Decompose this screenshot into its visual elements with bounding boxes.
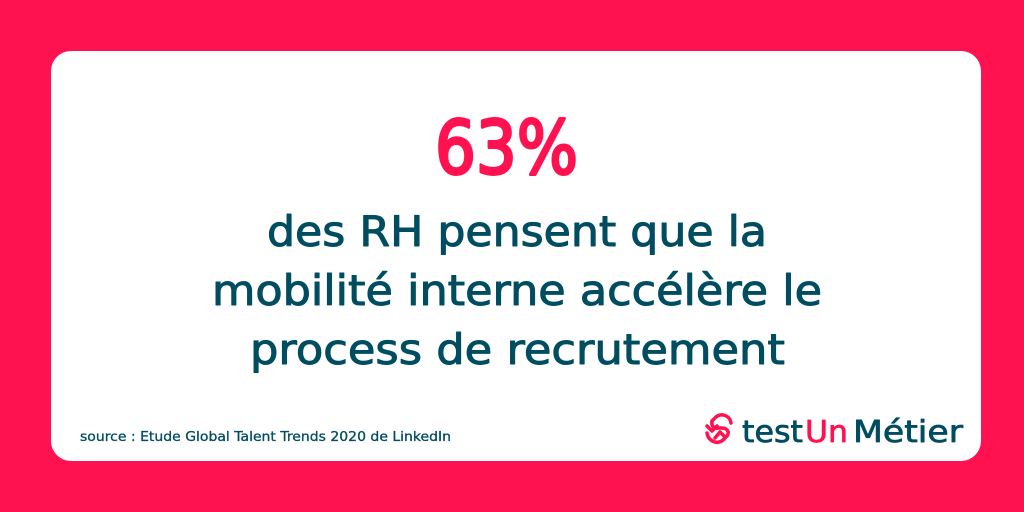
text block: main statement: process de recrutement [250,325,785,374]
logo: testUnMétier [707,415,964,450]
text block: main statement [212,207,822,374]
text block: source: source : Etude Global Talent Trends 2020 de LinkedIn [80,430,451,445]
text block: main statement: mobilité interne accélère le [212,266,822,315]
icon: circular arrows [707,415,731,442]
logo wordmark: test [742,415,803,450]
logo wordmark: Un [805,415,848,450]
logo wordmark: Métier [853,415,964,450]
panel: white card [51,51,981,461]
text block: main statement: des RH pensent que la [267,207,767,256]
heading: 63%: 63% [435,106,578,192]
